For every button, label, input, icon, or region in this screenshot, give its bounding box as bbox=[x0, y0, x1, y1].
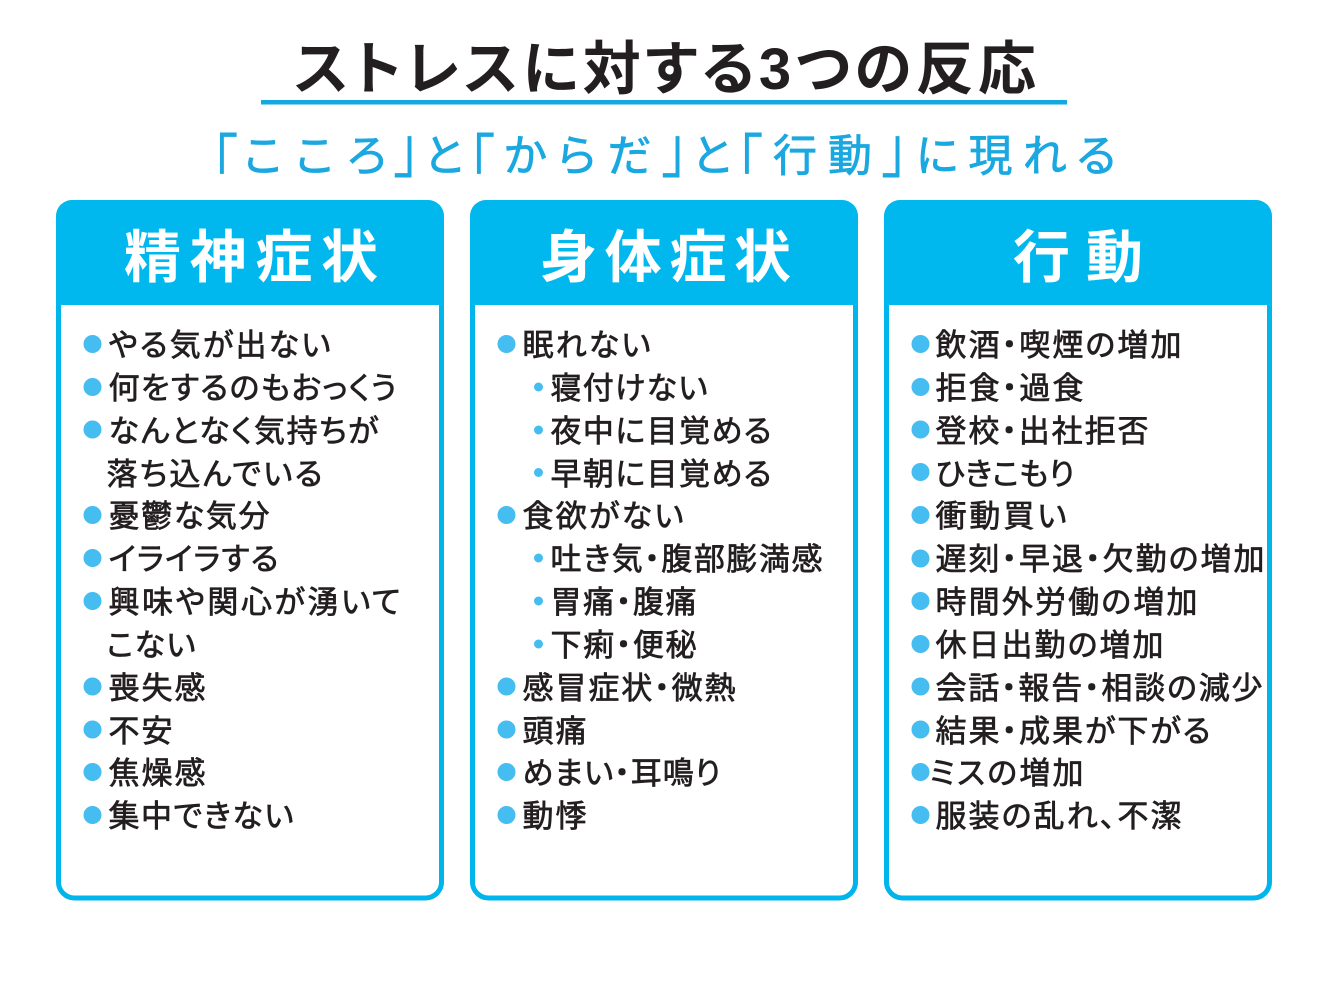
subtitle: 」 bbox=[662, 115, 688, 186]
list: 身体症状 items: 頭痛 bbox=[522, 714, 586, 749]
list: 行動 items: 飲酒・喫煙の増加 bbox=[936, 328, 1182, 363]
subtitle: と bbox=[424, 132, 463, 181]
subtitle: 「 bbox=[736, 130, 762, 201]
list: 精神症状 items: 喪失感 bbox=[108, 671, 206, 706]
list: 精神症状 items: なんとなく気持ちが bbox=[108, 414, 379, 449]
list: 精神症状 items: イライラする bbox=[108, 542, 278, 577]
list: 精神症状 items: 落ち込んでいる bbox=[106, 457, 322, 492]
list: 身体症状 items: 眠れない bbox=[522, 328, 650, 363]
subtitle: 行動 bbox=[773, 132, 872, 181]
list: 精神症状 items: やる気が出ない bbox=[108, 328, 330, 363]
list: 身体症状 items: 吐き気・腹部膨満感 bbox=[550, 542, 822, 577]
list: 身体症状 items: 下痢・便秘 bbox=[550, 628, 696, 663]
subtitle: 「 bbox=[468, 130, 494, 201]
list: 身体症状 items: 食欲がない bbox=[522, 499, 684, 534]
list: 身体症状 items: 動悸 bbox=[522, 799, 586, 834]
list: 身体症状 items: 感冒症状・微熱 bbox=[522, 671, 736, 706]
list: 行動 items: 休日出勤の増加 bbox=[936, 628, 1164, 663]
list: 身体症状 items: 胃痛・腹痛 bbox=[550, 585, 696, 620]
list: 精神症状 items: 憂鬱な気分 bbox=[108, 499, 270, 534]
title: ストレスに対する3つの反応 bbox=[294, 37, 1036, 102]
subtitle bbox=[211, 115, 1116, 201]
list: 精神症状 items: 集中できない bbox=[108, 799, 294, 834]
list: 身体症状 items: 早朝に目覚める bbox=[550, 457, 772, 492]
list: 精神症状 items: 焦燥感 bbox=[108, 756, 206, 791]
list: 身体症状 items: めまい・耳鳴り bbox=[522, 756, 720, 791]
subtitle: 」 bbox=[394, 115, 420, 186]
list: 行動 items: 衝動買い bbox=[936, 499, 1066, 534]
list: 行動 items: 時間外労働の増加 bbox=[936, 585, 1198, 620]
list: 精神症状 items: こない bbox=[106, 628, 196, 663]
list: 行動 items: ひきこもり bbox=[936, 457, 1074, 492]
subtitle: こころ bbox=[244, 132, 386, 181]
subtitle: 「 bbox=[211, 130, 237, 201]
heading: 精神症状: 精神症状 bbox=[124, 226, 378, 290]
heading: 身体症状: 身体症状 bbox=[540, 226, 791, 290]
list: 行動 items bbox=[912, 328, 1264, 834]
panel: 精神症状 bbox=[56, 200, 444, 898]
list: 精神症状 items: 何をするのもおっくう bbox=[108, 371, 396, 406]
list: 行動 items: ミスの増加 bbox=[930, 756, 1084, 791]
list: 行動 items: 会話・報告・相談の減少 bbox=[936, 671, 1262, 706]
subtitle: に現れる bbox=[916, 132, 1116, 181]
list: 行動 items: 服装の乱れ、不潔 bbox=[936, 799, 1182, 834]
list: 精神症状 items: 興味や関心が湧いて bbox=[108, 585, 400, 620]
subtitle: 」 bbox=[882, 115, 908, 186]
list: 行動 items: 登校・出社拒否 bbox=[936, 414, 1148, 449]
list: 精神症状 items: 不安 bbox=[108, 714, 172, 749]
list: 行動 items: 結果・成果が下がる bbox=[936, 714, 1210, 749]
list: 身体症状 items: 夜中に目覚める bbox=[550, 414, 772, 449]
panel: 身体症状 bbox=[470, 200, 858, 898]
panel: 行動 bbox=[884, 200, 1272, 898]
subtitle: からだ bbox=[504, 132, 652, 181]
list: 精神症状 items bbox=[84, 328, 400, 834]
list: 行動 items: 拒食・過食 bbox=[936, 371, 1084, 406]
list: 行動 items: 遅刻・早退・欠勤の増加 bbox=[936, 542, 1264, 577]
list: 身体症状 items bbox=[498, 328, 822, 834]
heading: 行動: 行動 bbox=[1013, 226, 1143, 290]
subtitle: と bbox=[692, 132, 731, 181]
list: 身体症状 items: 寝付けない bbox=[550, 371, 708, 406]
